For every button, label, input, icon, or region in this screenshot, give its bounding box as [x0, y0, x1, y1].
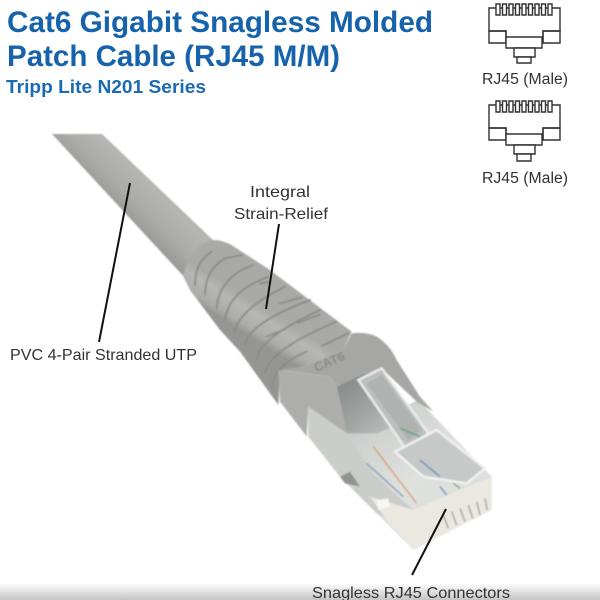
label: integral strain-relief: Integral [250, 184, 310, 201]
clear latch [358, 368, 428, 450]
photo: patch cable [52, 134, 492, 550]
plug side notch [340, 472, 360, 487]
strain relief boot [183, 240, 352, 405]
CAT6 moulded lettering: CAT6 [312, 349, 347, 375]
clear plug body [308, 400, 492, 550]
top hood of plug [280, 333, 433, 412]
pointer: connectors [412, 509, 446, 575]
latch inner glass [367, 375, 422, 440]
bottom floor shadow [0, 583, 600, 600]
title: Cat6 Gigabit Snagless Molded [7, 6, 433, 39]
subtitle: Tripp Lite N201 Series [6, 77, 206, 97]
gray latch wedge [278, 370, 347, 437]
coloured wires [367, 428, 460, 503]
contact block [370, 477, 492, 550]
label: RJ45 male bottom: RJ45 (Male) [482, 170, 568, 187]
boot ribs [195, 252, 348, 388]
label: RJ45 male top: RJ45 (Male) [482, 71, 568, 88]
shaded interior below hood [337, 370, 410, 433]
cable jacket [52, 134, 216, 280]
label: integral strain-relief: Strain-Relief [234, 206, 329, 223]
pointer: strain relief [266, 224, 279, 309]
pointer: PVC [99, 183, 130, 342]
latch base [395, 430, 485, 483]
label: integral strain-relief [234, 184, 329, 223]
plug highlight [377, 498, 390, 510]
boot and plug drawn in magnified crop coordinates [183, 240, 492, 550]
icon: RJ45 male connector bottom [489, 101, 560, 161]
title [7, 6, 433, 73]
side of clear plug [308, 407, 413, 530]
contact teeth [443, 498, 487, 528]
title: Patch Cable (RJ45 M/M) [7, 40, 340, 73]
icon: RJ45 male connector top [489, 4, 560, 63]
label: PVC: PVC 4-Pair Stranded UTP [10, 347, 197, 364]
